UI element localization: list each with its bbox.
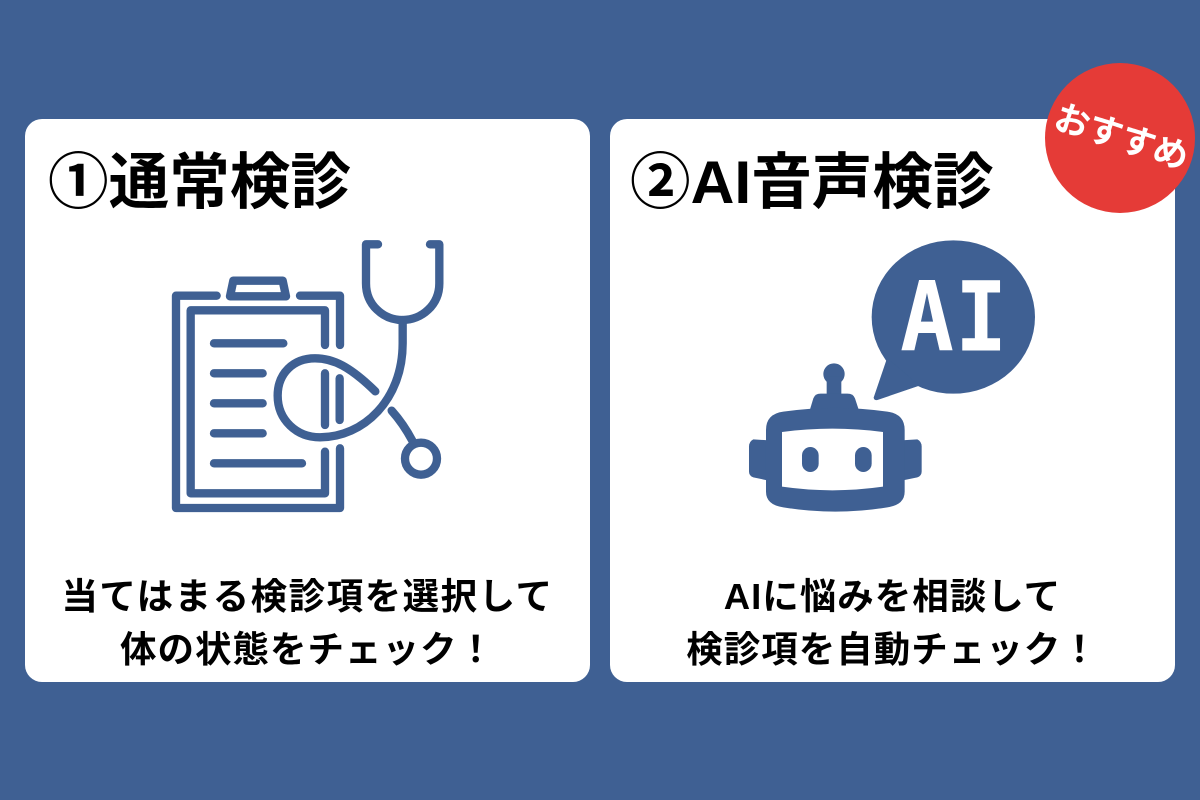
heading: AI voice checkup: ②AI音声検診 bbox=[630, 148, 994, 216]
text: normal checkup description bbox=[61, 576, 554, 670]
badge text: おすすめ bbox=[1049, 98, 1193, 177]
panel: normal checkup bbox=[25, 119, 590, 682]
panel: AI voice checkup bbox=[610, 119, 1175, 682]
text: AI voice checkup description: AIに悩みを相談して bbox=[724, 576, 1061, 617]
badge: recommended bbox=[1045, 63, 1195, 213]
text: AI voice checkup description: 検診項を自動チェック！ bbox=[686, 628, 1099, 670]
text: AI voice checkup description bbox=[686, 576, 1099, 670]
heading: normal checkup: ①通常検診 bbox=[48, 148, 351, 216]
icon: robot with AI speech bubble: A bbox=[900, 261, 954, 374]
icon: robot with AI speech bubble: I bbox=[955, 261, 1007, 374]
text: normal checkup description: 体の状態をチェック！ bbox=[120, 628, 495, 670]
text: normal checkup description: 当てはまる検診項を選択して bbox=[61, 576, 554, 617]
